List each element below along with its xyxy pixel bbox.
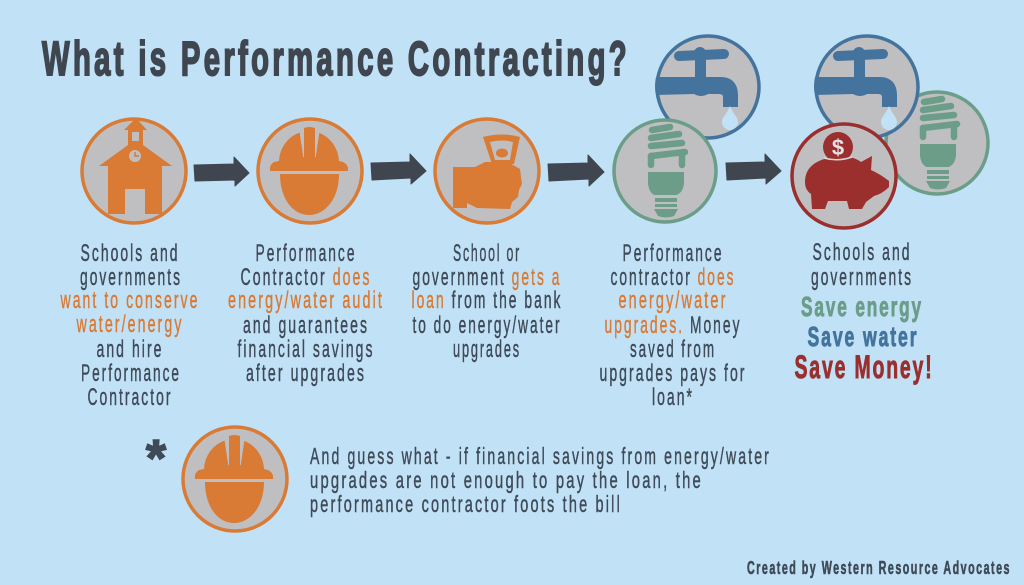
arrow 4 xyxy=(726,154,781,184)
text: step 5: Save water xyxy=(808,321,918,352)
text: step 2: Performance xyxy=(256,240,356,267)
footnote text xyxy=(310,443,771,517)
footnote text: upgrades are not enough to pay the loan, the xyxy=(310,467,703,493)
arrow 1 xyxy=(194,157,249,186)
text: step 4: upgrades. Money xyxy=(604,312,742,339)
text: step 4: saved from xyxy=(630,336,716,363)
footnote text: performance contractor foots the bill xyxy=(310,491,622,517)
text: step 3: upgrades xyxy=(453,336,521,363)
text: step 2: Contractor does xyxy=(240,264,372,291)
icon: hard hat xyxy=(258,119,362,223)
text: step 1: Schools and xyxy=(80,240,180,267)
text: step 4: upgrades pays for xyxy=(600,360,746,387)
asterisk: * xyxy=(146,430,167,488)
icon: hard hat, footnote xyxy=(183,427,287,531)
text: step 1 xyxy=(60,240,200,411)
icon: light bulb xyxy=(614,120,716,222)
text: step 2 xyxy=(228,240,384,387)
text: step 3: to do energy/water xyxy=(412,312,562,339)
icon: light bulb, result xyxy=(886,92,988,194)
text: step 5: Save Money! xyxy=(794,349,934,385)
text: step 1: and hire xyxy=(96,336,164,363)
icon: piggy bank xyxy=(792,124,896,228)
icon: water tap, result xyxy=(814,36,918,138)
text: step 4 xyxy=(600,240,746,411)
text: step 3: loan from the bank xyxy=(412,287,562,314)
text: step 3: government gets a xyxy=(412,264,562,291)
text: step 4: loan* xyxy=(652,384,694,411)
text: step 4: energy/water xyxy=(618,287,728,314)
arrow 2 xyxy=(371,154,426,184)
text: step 5: Save energy xyxy=(801,291,923,322)
text: step 1: governments xyxy=(80,264,182,291)
text: step 2: financial savings xyxy=(238,336,374,363)
text: step 3 xyxy=(412,240,562,363)
text: step 3: School or xyxy=(453,240,521,267)
text: step 2: energy/water audit xyxy=(228,287,384,314)
text: step 4: contractor does xyxy=(610,264,736,291)
text: step 5: Schools and xyxy=(812,239,912,266)
icon: hand with money xyxy=(435,119,539,223)
text: step 1: want to conserve xyxy=(60,287,200,314)
text: step 1: water/energy xyxy=(76,311,184,338)
text: step 5 xyxy=(794,239,934,385)
text: step 4: Performance xyxy=(622,240,724,267)
text: step 5: governments xyxy=(811,264,913,291)
icon: piggy bank: $ xyxy=(832,135,844,160)
icon: school xyxy=(82,118,186,223)
text: step 2: and guarantees xyxy=(243,312,369,339)
title: What is Performance Contracting? xyxy=(42,33,630,86)
icon: water tap xyxy=(655,36,759,138)
text: step 1: Performance xyxy=(81,360,181,387)
text: step 2: after upgrades xyxy=(246,360,366,387)
text: step 1: Contractor xyxy=(88,384,172,411)
arrow 3 xyxy=(548,155,604,186)
